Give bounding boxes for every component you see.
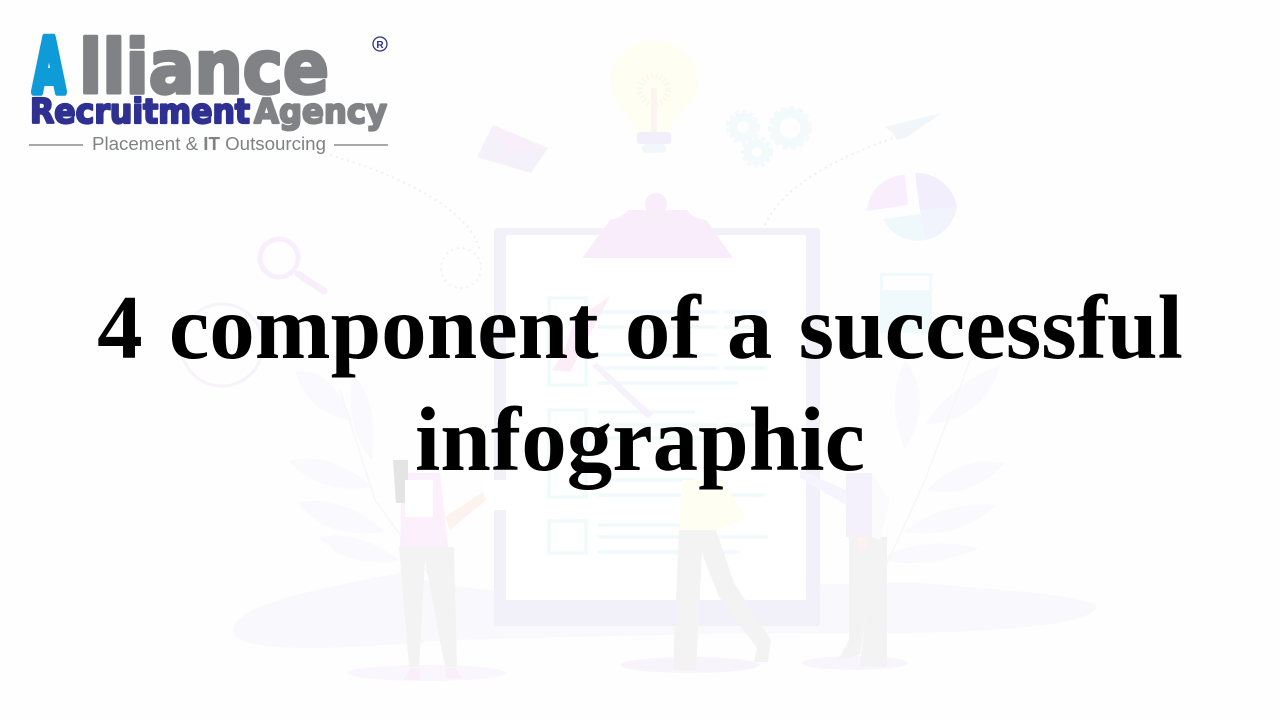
logo	[29, 24, 388, 154]
clipboard clip	[582, 193, 733, 258]
checklist row 2	[549, 410, 765, 497]
check mark	[552, 296, 610, 372]
logo word: Alliance	[33, 24, 329, 111]
ground blob	[233, 573, 1097, 648]
target circle	[181, 304, 263, 386]
background illustration	[181, 40, 1097, 681]
gears	[728, 108, 810, 166]
light bulb	[610, 40, 698, 153]
logo word: Recruitment: Recruitment	[30, 92, 250, 132]
clipboard	[494, 228, 820, 626]
calculator	[880, 273, 932, 333]
registered mark	[373, 37, 387, 51]
dotted path right	[765, 138, 893, 225]
blue initial A: A	[33, 24, 65, 110]
dotted path left	[330, 155, 480, 250]
woman	[347, 460, 507, 681]
pencil	[592, 363, 653, 419]
magnifier	[260, 239, 324, 291]
plant right	[875, 360, 1005, 590]
checklist row 1	[549, 298, 765, 385]
paper plane	[885, 113, 942, 140]
title line 1: 4 component of a successful	[97, 277, 1183, 378]
pie chart	[867, 173, 957, 241]
grey letters: lliance	[79, 25, 329, 111]
logo word: Agency: Agency	[254, 92, 387, 132]
title	[97, 277, 1183, 490]
logo tagline: Placement & IT Outsourcing	[92, 133, 326, 154]
tagline rules	[29, 144, 388, 146]
man in purple	[800, 470, 908, 670]
man in yellow	[620, 480, 771, 673]
registered mark: R	[376, 40, 384, 51]
title line 2: infographic	[415, 389, 865, 490]
envelope	[477, 125, 548, 173]
dotted circle	[441, 248, 481, 288]
checklist row 3	[549, 521, 768, 553]
plant left	[289, 371, 440, 590]
